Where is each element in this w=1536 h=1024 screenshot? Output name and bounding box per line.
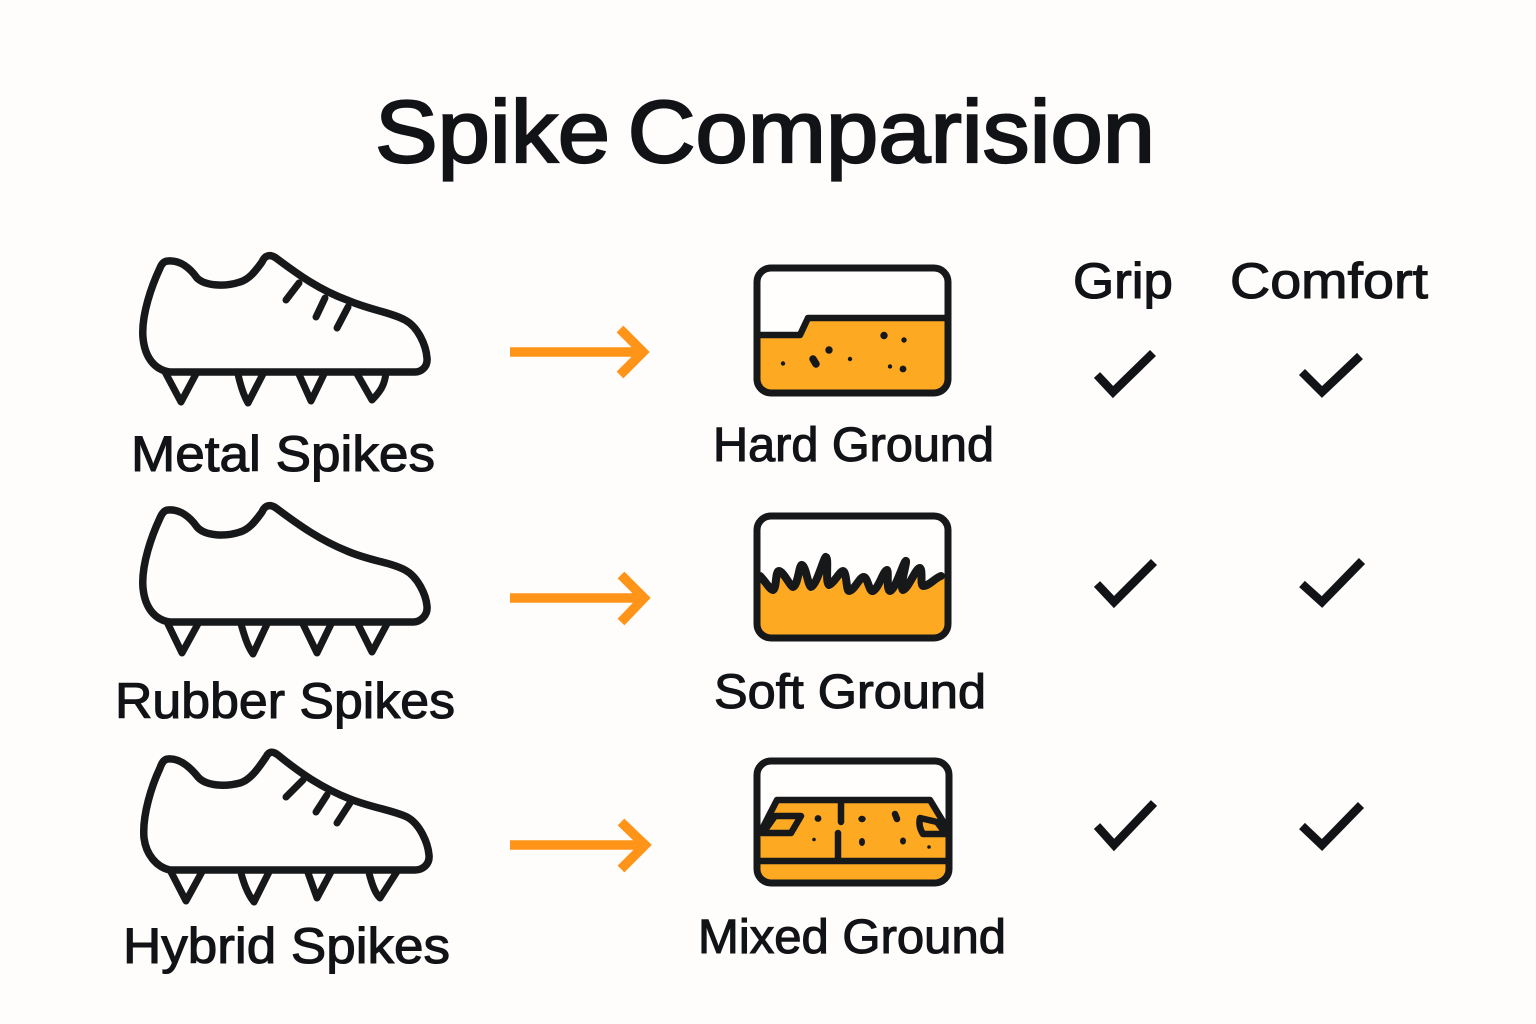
label: Hybrid Spikes: Hybrid Spikes bbox=[123, 918, 450, 974]
arrow: metal to hard ground bbox=[510, 329, 643, 375]
row: rubber spikes bbox=[115, 506, 1362, 729]
label: Rubber Spikes: Rubber Spikes bbox=[115, 673, 455, 729]
row: hybrid spikes bbox=[123, 752, 1361, 974]
label: Metal Spikes: Metal Spikes bbox=[131, 426, 435, 482]
title: Spike Comparision bbox=[375, 82, 1155, 181]
label: Mixed Ground: Mixed Ground bbox=[698, 911, 1006, 964]
row: metal spikes bbox=[131, 256, 1360, 482]
icon: mixed ground bbox=[757, 761, 949, 883]
check: metal comfort bbox=[1302, 356, 1360, 392]
check: rubber comfort bbox=[1302, 561, 1362, 602]
icon: soft ground bbox=[757, 516, 948, 638]
check: rubber grip bbox=[1097, 562, 1154, 602]
arrow: hybrid to mixed ground bbox=[510, 822, 645, 869]
column heading: Grip: Grip bbox=[1073, 253, 1173, 309]
label: Hard Ground: Hard Ground bbox=[713, 419, 994, 472]
icon: metal spikes shoe bbox=[143, 256, 427, 403]
label: Soft Ground: Soft Ground bbox=[714, 666, 986, 719]
icon: hybrid spikes shoe bbox=[144, 752, 429, 902]
arrow: rubber to soft ground bbox=[510, 575, 644, 622]
icon: rubber spikes shoe bbox=[143, 506, 427, 654]
check: metal grip bbox=[1097, 353, 1153, 392]
check: hybrid grip bbox=[1097, 803, 1154, 845]
check: hybrid comfort bbox=[1302, 805, 1361, 845]
column heading: Comfort: Comfort bbox=[1230, 253, 1428, 309]
icon: hard ground bbox=[757, 268, 948, 393]
